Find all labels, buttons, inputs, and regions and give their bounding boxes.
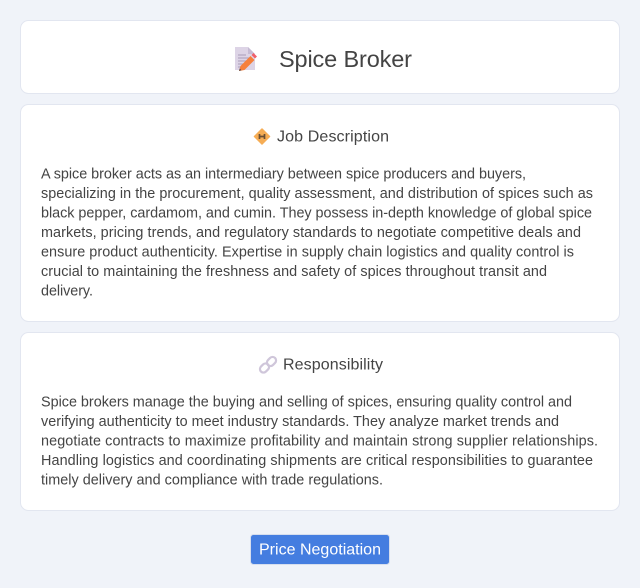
icon: document with pencil [235,47,257,71]
panel: job description [20,104,620,322]
text block: job description: specializing in the procurement, quality assessment, and distribution of spices such as [41,186,593,202]
text block: job description [41,167,593,300]
text block: responsibility: verifying authenticity to meet industry standards. They analyze market trends and [41,414,559,430]
text block: responsibility: Handling logistics and coordinating shipments are critical responsibilities to guarantee [41,453,593,469]
heading: responsibility: Responsibility [283,356,383,374]
panel: responsibility [20,332,620,510]
title: Spice Broker [279,46,412,72]
icon: chain link [258,355,278,374]
text block: job description: A spice broker acts as an intermediary between spice producers and buyers, [41,167,526,183]
text block: job description: ensure product authenticity. Expertise in supply chain logistics and quality control is [41,245,574,261]
text block: responsibility: timely delivery and compliance with trade regulations. [41,473,383,489]
text block: responsibility: negotiate contracts to maximize profitability and maintain strong supplier relationships. [41,434,598,450]
panel: title card [20,20,620,94]
text block: job description: black pepper, cardamom, and cumin. They possess in-depth knowledge of global spice [41,206,592,222]
text block: job description: crucial to maintaining the freshness and safety of spices throughout transit and [41,264,547,280]
button: price negotiation: Price Negotiation [259,542,381,558]
text block: job description: delivery. [41,284,93,300]
heading: job description: Job Description [277,128,389,146]
icon: orange diamond sign [254,129,270,144]
button: price negotiation [250,534,390,564]
text block: job description: markets, pricing trends, and regulatory standards to negotiate competitive deals and [41,225,581,241]
text block: responsibility [41,395,598,489]
text block: responsibility: Spice brokers manage the buying and selling of spices, ensuring quality control and [41,395,572,411]
